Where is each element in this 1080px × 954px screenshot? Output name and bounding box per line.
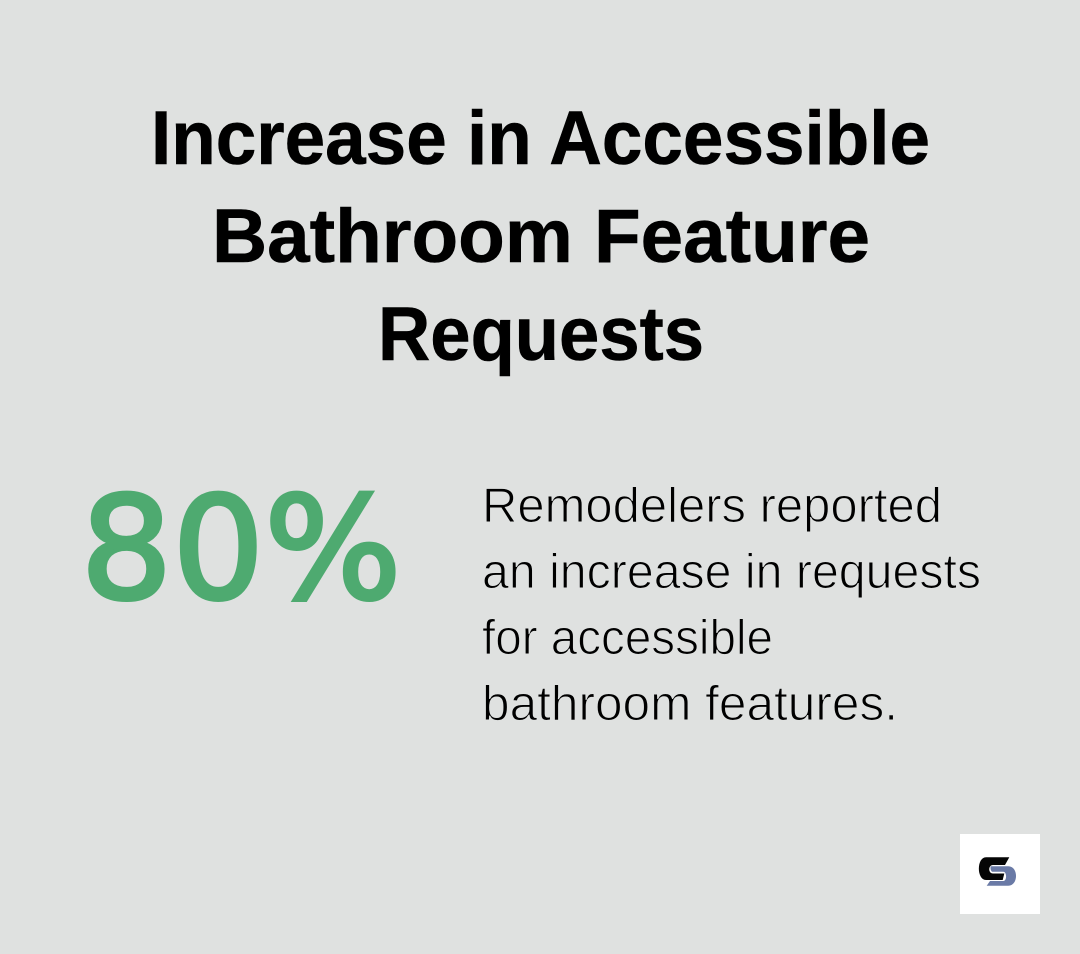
description text [482,479,981,731]
title: Requests [378,292,704,377]
title: Increase in Accessible [151,96,930,181]
description text: bathroom features. [482,677,898,731]
description text: for accessible [482,611,773,665]
statistic: 80%: 80% [80,467,402,632]
title: Bathroom Feature [212,194,870,279]
title [151,96,930,377]
description text: Remodelers reported [482,479,942,533]
description text: an increase in requests [482,545,981,599]
logo badge [960,834,1040,914]
